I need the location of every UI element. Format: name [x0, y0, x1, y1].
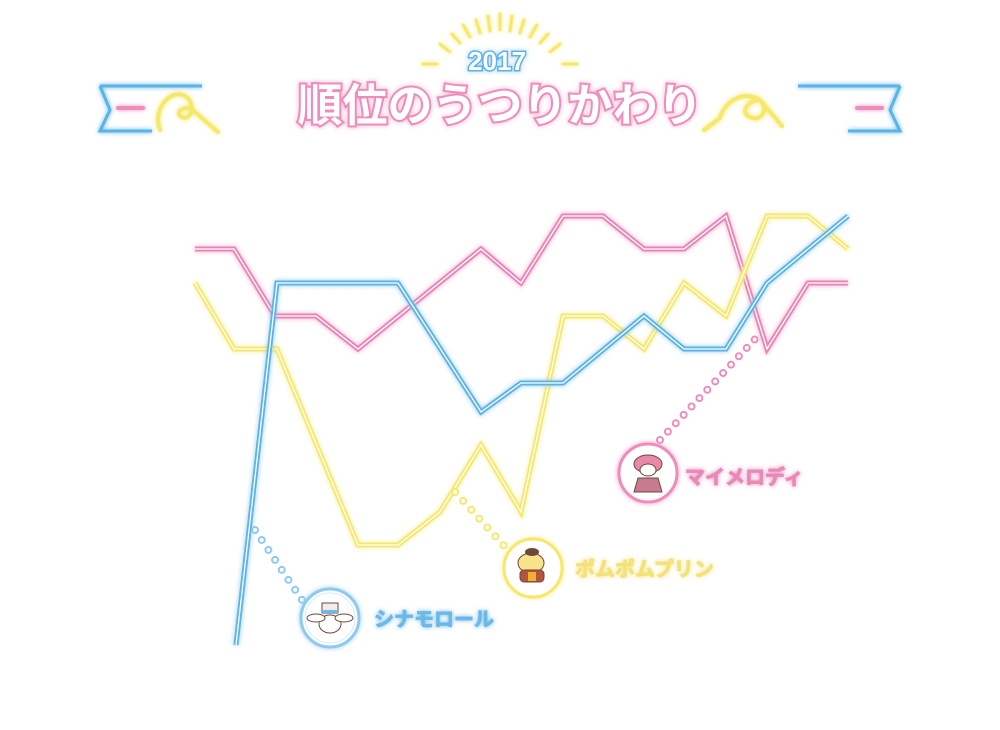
callout: シナモロール	[255, 530, 494, 647]
left ribbon	[100, 86, 218, 132]
callout: ポムポムプリン	[455, 492, 714, 597]
callout: マイメロディ: マイメロディ	[685, 465, 804, 489]
sun rays	[423, 14, 577, 64]
right ribbon	[704, 86, 900, 131]
callout: マイメロディ	[619, 337, 804, 502]
icon: cinnamoroll	[307, 603, 353, 633]
line: yellow (ポムポムプリン)	[195, 216, 848, 545]
title	[100, 14, 900, 132]
line chart	[195, 216, 848, 645]
icon: pompompurin	[518, 548, 544, 582]
line: blue (シナモロール)	[236, 216, 848, 645]
icon: my melody	[634, 455, 662, 492]
heading: 順位のうつりかわり	[297, 80, 703, 131]
line: pink (マイメロディ)	[195, 216, 848, 349]
year 2017: 2017	[468, 46, 526, 76]
callout: ポムポムプリン: ポムポムプリン	[575, 558, 714, 581]
callout: シナモロール: シナモロール	[374, 609, 494, 631]
